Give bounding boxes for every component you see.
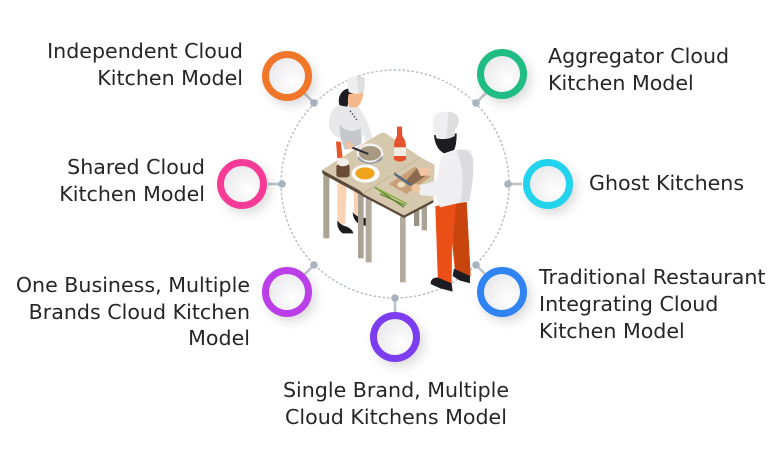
label: Shared Cloud Kitchen Model: Kitchen Model (59, 182, 205, 206)
label: Single Brand, Multiple Cloud Kitchens Model: Cloud Kitchens Model (285, 405, 507, 429)
icon: green ring (480, 52, 530, 103)
icon: pink ring (220, 162, 270, 213)
label: Traditional Restaurant Integrating Cloud Kitchen Model: Kitchen Model (539, 319, 685, 343)
label: Shared Cloud Kitchen Model: Shared Cloud (67, 155, 205, 179)
label: Independent Cloud Kitchen Model: Independent Cloud (47, 39, 243, 63)
icon: cyan ring (526, 162, 576, 213)
icon: orange ring (266, 54, 315, 105)
label: Traditional Restaurant Integrating Cloud Kitchen Model: Traditional Restaurant (538, 265, 766, 289)
dashed circle with connectors (268, 70, 522, 312)
jar (336, 158, 350, 177)
label: Aggregator Cloud Kitchen Model: Kitchen Model (548, 71, 694, 95)
illustration: two chefs at a table (322, 76, 473, 292)
label: One Business, Multiple Brands Cloud Kitchen Model: Model (188, 326, 250, 350)
label: Single Brand, Multiple Cloud Kitchens Model: Single Brand, Multiple (283, 378, 509, 402)
cutting board and knife (389, 167, 431, 194)
sauce bottle (394, 127, 406, 162)
label: Independent Cloud Kitchen Model: Kitchen Model (97, 66, 243, 90)
icon: purple ring (266, 270, 315, 321)
label: One Business, Multiple Brands Cloud Kitchen Model: One Business, Multiple (16, 273, 250, 297)
label: One Business, Multiple Brands Cloud Kitchen Model: Brands Cloud Kitchen (29, 300, 250, 324)
label: Traditional Restaurant Integrating Cloud Kitchen Model: Integrating Cloud (539, 292, 718, 316)
green vegetables (375, 187, 407, 207)
table (322, 133, 435, 282)
bowl (345, 141, 383, 165)
icon: violet ring (374, 316, 423, 366)
woman chef (329, 76, 373, 233)
label: Aggregator Cloud Kitchen Model: Aggregator Cloud (548, 44, 729, 68)
icon: blue ring (480, 270, 530, 321)
plate (352, 165, 380, 183)
label: Ghost Kitchens: Ghost Kitchens (589, 171, 744, 195)
male chef (412, 111, 473, 292)
